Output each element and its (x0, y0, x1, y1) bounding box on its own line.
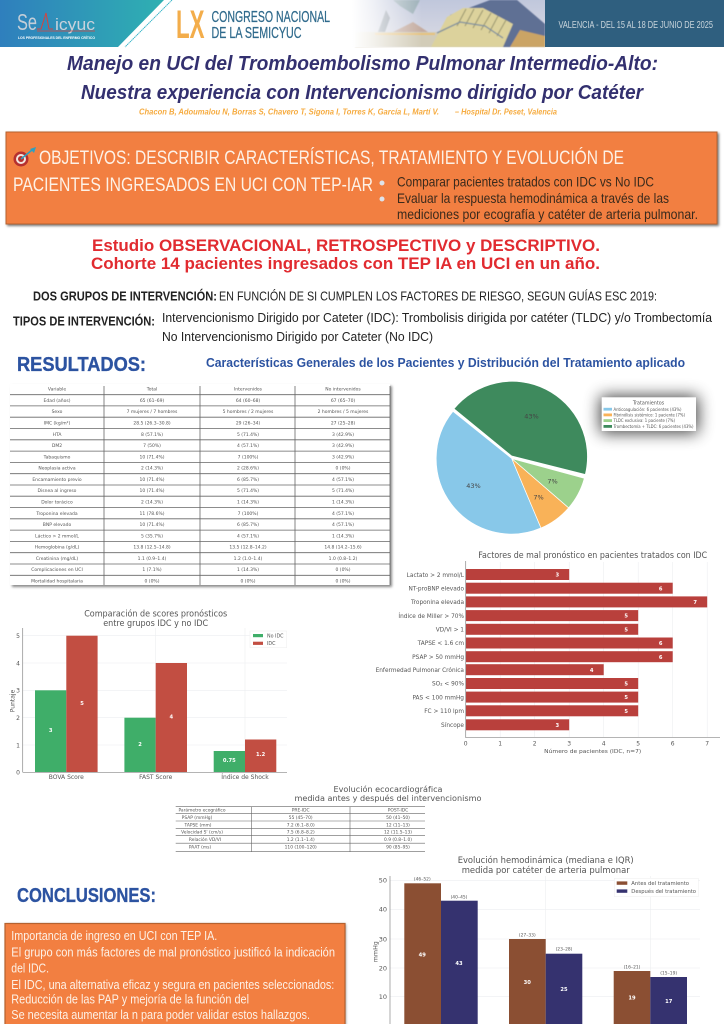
bar values: 43 (455, 961, 463, 967)
bar values: 6 (659, 641, 663, 647)
slice: TLDC 7% (512, 458, 584, 508)
table: patient characteristics: Hemoglobina (g/dL) (35, 545, 80, 551)
chart legend: Antes del tratamiento (631, 881, 689, 887)
title: Nuestra experiencia con Intervencionismo dirigido por Catéter (81, 81, 644, 104)
table: patient characteristics: 0 (0%) (336, 567, 351, 573)
conclusions text: El grupo con más factores de mal pronóstico justificó la indicación (11, 945, 335, 959)
bar values: 5 (624, 695, 628, 701)
table: echocardiographic evolution: 7.2 (6.1–8.0) (287, 822, 315, 828)
logo: Semicyuc: Se (17, 9, 37, 35)
table: echocardiographic evolution: TAPSE (mm) (184, 822, 212, 828)
conclusions text: Reducción de las PAP y mejoría de la función del (11, 992, 249, 1006)
chart title: Comparación de scores pronósticos (84, 608, 228, 620)
table: patient characteristics: Intervenidos (234, 387, 263, 393)
IQR labels: (27–33) (519, 932, 536, 938)
congress name: DE LA SEMICYUC (212, 25, 302, 42)
table: echocardiographic evolution: 55 (45–70) (289, 815, 313, 821)
bar values: 3 (555, 573, 559, 579)
table: patient characteristics: 1.1 (0.9–1.4) (138, 556, 167, 562)
IQR labels: (46–52) (414, 876, 431, 882)
pie legend: Tratamientos (632, 401, 665, 407)
pie percentage labels: 7% (547, 477, 558, 485)
table: patient characteristics: 10 (71.4%) (140, 488, 165, 494)
conclusions text (11, 929, 335, 1022)
x axis ticks: 0 (464, 740, 468, 748)
y axis ticks: 3 (16, 688, 20, 695)
objective bullet list: Evaluar la respuesta hemodinámica a través de las (397, 190, 669, 206)
table: patient characteristics: 28.5 (26.3–30.8) (133, 420, 171, 426)
x axis ticks: 4 (602, 740, 606, 748)
x axis categories (49, 774, 269, 781)
y axis ticks: 50 (379, 877, 387, 885)
y axis ticks: 10 (379, 993, 387, 1001)
x axis categories: Índice de Shock (221, 774, 269, 781)
table: patient characteristics (10, 384, 392, 587)
pie legend: Trombectomía + TLDC: 6 pacientes (43%) (613, 423, 694, 430)
bars: IDC (66, 636, 276, 772)
table: patient characteristics: Variable (48, 387, 66, 393)
table: patient characteristics: Neoplasia activa (38, 466, 76, 472)
conclusions text: del IDC. (11, 961, 49, 975)
table: patient characteristics: 4 (57.1%) (237, 443, 259, 449)
y axis ticks: 30 (379, 935, 387, 943)
category labels: Lactato > 2 mmol/L (407, 573, 465, 579)
y axis ticks (379, 877, 387, 1001)
intervention groups text: TIPOS DE INTERVENCIÓN: (13, 314, 155, 328)
table: patient characteristics: 6 (85.7%) (237, 522, 259, 528)
x axis categories: BOVA Score (49, 774, 84, 781)
LX mark: LX (176, 3, 205, 47)
intervention groups text: DOS GRUPOS DE INTERVENCIÓN: (33, 288, 217, 304)
table: patient characteristics: 4 (57.1%) (332, 477, 354, 483)
y axis ticks: 0 (16, 770, 20, 777)
header blue band (0, 0, 164, 47)
heading: resultados: RESULTADOS: (17, 353, 146, 376)
table: patient characteristics: 64 (60–68) (236, 398, 260, 404)
table: patient characteristics: HTA (53, 432, 62, 438)
bars: después del tratamiento (441, 901, 687, 1024)
table: patient characteristics: 5 (71.4%) (237, 488, 259, 494)
heading: conclusiones: CONCLUSIONES: (17, 884, 156, 907)
bar values: 19 (628, 996, 636, 1002)
table: patient characteristics: Troponina elevada (35, 511, 78, 517)
x axis ticks: 6 (671, 740, 675, 748)
objective heading (13, 146, 624, 196)
conclusions text: Se necesita aumentar la n para poder validar estos hallazgos. (11, 1008, 310, 1022)
y axis ticks (16, 633, 20, 777)
congress name (212, 9, 330, 42)
authors: – Hospital Dr. Peset, Valencia (455, 108, 558, 116)
IQR labels: (23–28) (556, 947, 573, 953)
conclusions text: El IDC, una alternativa eficaz y segura en pacientes seleccionados: (11, 978, 334, 992)
table: echocardiographic evolution: 1.2 (1.1–1.4) (287, 837, 315, 843)
IQR labels: (15–19) (660, 970, 677, 976)
objective bullet list (380, 174, 698, 222)
pie legend: TLDC exclusiva: 1 paciente (7%) (613, 418, 675, 424)
logo: Semicyuc: LOS PROFESIONALES DEL ENFERMO CRÍTICO (18, 35, 96, 40)
IQR labels (414, 876, 677, 976)
x axis label: Número de pacientes (IDC, n=7) (544, 748, 641, 755)
title (67, 52, 658, 104)
bar values: 5 (624, 709, 628, 715)
study design text (91, 236, 600, 273)
study design text: Estudio OBSERVACIONAL, RETROSPECTIVO y DESCRIPTIVO. (92, 236, 600, 255)
table: patient characteristics: 2 (14.3%) (141, 500, 163, 506)
horizontal bars (466, 569, 707, 730)
header banner (0, 0, 724, 47)
table: echocardiographic evolution: 12 (11–13) (386, 822, 410, 828)
table: patient characteristics: 2 hombres / 5 mujeres (318, 409, 369, 415)
x axis ticks (464, 740, 709, 748)
bar values: 7 (693, 600, 697, 606)
table: patient characteristics: 10 (71.4%) (140, 454, 165, 460)
table: echocardiographic evolution: 110 (100–120) (285, 845, 317, 851)
table: patient characteristics: 1.0 (0.8–1.2) (329, 556, 358, 562)
conclusions text: Importancia de ingreso en UCI con TEP IA. (11, 929, 217, 943)
table: patient characteristics: Creatinina (mg/dL) (36, 556, 78, 562)
bar values: 0.75 (223, 758, 236, 764)
table: patient characteristics: 7 mujeres / 7 hombres (127, 409, 178, 415)
table: patient characteristics: 1.2 (1.0–1.4) (234, 556, 263, 562)
bar values: 30 (524, 980, 531, 986)
y axis line (389, 876, 391, 1024)
photo: Valencia architecture (352, 0, 546, 47)
table: patient characteristics: 4 (57.1%) (332, 511, 354, 517)
chart title: medida por catéter de arteria pulmonar (462, 865, 630, 876)
category labels: Enfermedad Pulmonar Crónica (376, 667, 464, 674)
bar values (419, 952, 673, 1005)
table: echocardiographic evolution: POST-IDC (388, 808, 408, 814)
bar values: 3 (555, 723, 559, 729)
table: patient characteristics: 1 (14.3%) (237, 567, 259, 573)
chart legend: Después del tratamiento (631, 888, 696, 895)
dates panel (545, 0, 724, 47)
IQR labels: (40–45) (451, 894, 468, 900)
y axis ticks: 40 (379, 906, 387, 914)
table: patient characteristics: Edad (años) (44, 398, 71, 404)
table: echocardiographic evolution: Velocidad S' (cm/s) (181, 830, 223, 836)
bar values (49, 701, 266, 764)
table: patient characteristics: Sexo (52, 409, 63, 415)
category labels: Síncope (441, 722, 464, 729)
table: patient characteristics: 2 (28.6%) (237, 466, 259, 472)
echo evolution title: medida antes y después del intervencionismo (294, 793, 482, 803)
table: echocardiographic evolution: 50 (41–50) (386, 815, 410, 821)
table: patient characteristics: 10 (71.4%) (140, 522, 165, 528)
category labels: Troponina elevada (410, 600, 464, 606)
table: patient characteristics: Total (146, 387, 157, 393)
table: patient characteristics: 5 (35.7%) (141, 533, 163, 539)
table: patient characteristics: 5 (71.4%) (332, 488, 354, 494)
congress name: CONGRESO NACIONAL (212, 9, 330, 26)
bars: No IDC (35, 690, 245, 772)
table: echocardiographic evolution: 7.5 (6.8–8.2) (287, 830, 315, 836)
objective bullet list: Comparar pacientes tratados con IDC vs No IDC (397, 174, 654, 190)
chart title (84, 608, 228, 629)
table: patient characteristics: 0 (0%) (241, 578, 256, 584)
category labels: PSAP > 50 mmHg (412, 655, 464, 661)
category labels: Índice de Miller > 70% (398, 613, 464, 620)
bar chart: evolución hemodinámica (372, 855, 700, 1024)
table: echocardiographic evolution: Parámetro ecográfico (178, 806, 226, 814)
axes (23, 628, 287, 772)
bar values: 4 (169, 714, 173, 720)
pie legend (600, 396, 698, 433)
table: echocardiographic evolution: PAAT (ms) (189, 845, 211, 851)
icon: target with dart (14, 147, 36, 166)
table: patient characteristics: 1 (14.3%) (332, 533, 354, 539)
logo: Semicyuc (17, 9, 96, 40)
heading: patient characteristics: Características Generales de los Pacientes y Distribución del Tratamiento aplicado (206, 356, 685, 370)
chart legend: IDC (267, 641, 276, 647)
table: echocardiographic evolution: PSAP (mmHg) (182, 815, 213, 821)
x axis ticks: 5 (636, 740, 640, 748)
table: patient characteristics: 0 (0%) (336, 466, 351, 472)
table: patient characteristics: 7 (100%) (238, 454, 259, 460)
table: echocardiographic evolution: 12 (11.5–13) (384, 830, 412, 836)
panel: conclusiones (5, 924, 346, 1024)
bar values: 5 (624, 627, 628, 633)
bar values: 5 (624, 614, 628, 620)
table: patient characteristics: 10 (71.4%) (140, 477, 165, 483)
thin teal diagonal line (125, 0, 172, 47)
table: patient characteristics: DM2 (52, 443, 62, 449)
logo: Semicyuc: icyuc (55, 15, 96, 34)
chart title: entre grupos IDC y no IDC (103, 619, 208, 629)
table: patient characteristics: 3 (42.9%) (332, 454, 354, 460)
pie percentage labels (466, 412, 558, 502)
echo evolution title (294, 784, 482, 803)
bar chart: factores de mal pronóstico (376, 550, 720, 755)
table: patient characteristics: 8 (57.1%) (141, 432, 163, 438)
axes (466, 561, 720, 738)
y axis label: Puntaje (10, 689, 16, 712)
bar values: 25 (560, 987, 568, 993)
bar values: 2 (138, 742, 142, 748)
table: patient characteristics: Mortalidad hospitalaria (31, 578, 83, 584)
bar values: 3 (49, 728, 53, 734)
category labels: SO₂ < 90% (432, 682, 464, 688)
category labels: NT-proBNP elevado (408, 586, 464, 592)
table: patient characteristics: Complicaciones en UCI (31, 567, 83, 573)
table: patient characteristics: 3 (42.9%) (332, 432, 354, 438)
chart legend (614, 878, 698, 897)
bar values: 6 (659, 586, 663, 592)
IQR labels: (16–21) (624, 965, 641, 971)
table: patient characteristics: 3 (42.9%) (332, 443, 354, 449)
table: patient characteristics: 14.8 (14.2–15.6) (324, 545, 362, 551)
table: patient characteristics: 13.8 (12.5–14.8) (133, 545, 171, 551)
objective heading: PACIENTES INGRESADOS EN UCI CON TEP-IAR (13, 174, 373, 196)
table: echocardiographic evolution: 90 (85–95) (386, 845, 410, 851)
y axis ticks: 4 (16, 660, 20, 667)
table: patient characteristics: 6 (85.7%) (237, 477, 259, 483)
title: Manejo en UCI del Tromboembolismo Pulmonar Intermedio-Alto: (67, 52, 658, 75)
chart title: Factores de mal pronóstico en pacientes tratados con IDC (478, 550, 707, 560)
table: patient characteristics: No intervenidos (325, 387, 361, 393)
table: patient characteristics: 65 (61–69) (140, 398, 164, 404)
echo evolution title: Evolución ecocardiográfica (334, 784, 442, 794)
table: patient characteristics: Encamamiento previo (32, 477, 82, 483)
table: patient characteristics: 5 hombres / 2 mujeres (223, 409, 274, 415)
slice: trombectomía + TLDC 43% (454, 381, 587, 474)
table: patient characteristics: BNP elevado (43, 522, 71, 528)
x axis ticks: 7 (705, 740, 709, 748)
slice: fibrinólisis 7% (512, 458, 569, 528)
bar values: 17 (665, 999, 673, 1005)
intervention groups text (13, 288, 713, 344)
bar values: 1.2 (256, 752, 266, 758)
authors: Chacon B, Adoumalou N, Borras S, Chavero T, Sigona I, Torres K, García L, Martí V. (139, 108, 439, 116)
table: patient characteristics: 7 (50%) (143, 443, 161, 449)
table: echocardiographic evolution: 0.9 (0.8–1.0) (384, 837, 412, 843)
pie percentage labels: 43% (466, 482, 481, 490)
intervention groups text: No Intervencionismo Dirigido por Cateter (No IDC) (162, 329, 433, 344)
study design text: Cohorte 14 pacientes ingresados con TEP IA en UCI en un año. (91, 254, 600, 273)
bar values: 5 (80, 701, 84, 707)
panel: objetivos (6, 132, 719, 226)
chart legend: No IDC (267, 634, 284, 640)
y axis label: mmHg (372, 941, 380, 962)
table: patient characteristics: 1 (14.3%) (332, 500, 354, 506)
category labels: VD/VI > 1 (436, 628, 464, 634)
pie percentage labels: 43% (524, 412, 539, 420)
table: patient characteristics: 2 (14.3%) (141, 466, 163, 472)
category labels (376, 573, 465, 729)
bar values: 5 (624, 682, 628, 688)
table: patient characteristics: 27 (25–28) (331, 420, 355, 426)
table: echocardiographic evolution: PRE-IDC (292, 808, 310, 814)
pie chart: treatment distribution (436, 381, 587, 534)
y axis ticks: 20 (379, 964, 387, 972)
category labels: TAPSE < 1.6 cm (417, 641, 464, 647)
table: patient characteristics: 5 (71.4%) (237, 432, 259, 438)
table: patient characteristics: 4 (57.1%) (237, 533, 259, 539)
table: patient characteristics: 67 (65–70) (331, 398, 355, 404)
pie legend: Fibrinólisis sistémico: 1 paciente (7%) (614, 412, 685, 418)
bar values: 6 (659, 655, 663, 661)
bar values: 4 (590, 668, 594, 674)
x axis ticks: 2 (533, 740, 537, 748)
table: echocardiographic evolution (176, 806, 425, 852)
table: patient characteristics: 11 (78.6%) (140, 511, 165, 517)
table: patient characteristics: 13.5 (12.8–14.2) (229, 545, 267, 551)
chart legend (250, 631, 287, 648)
bars: antes del tratamiento (404, 883, 650, 1024)
y axis ticks: 5 (16, 633, 20, 640)
intervention groups text: EN FUNCIÓN DE SI CUMPLEN LOS FACTORES DE RIESGO, SEGUN GUÍAS ESC 2019: (219, 288, 657, 304)
table: patient characteristics: 4 (57.1%) (332, 522, 354, 528)
chart title: Evolución hemodinámica (mediana e IQR) (458, 855, 634, 866)
table: patient characteristics: Dolor torácico (41, 498, 73, 506)
y axis ticks: 1 (16, 742, 20, 749)
category labels: PAS < 100 mmHg (412, 695, 464, 701)
table: patient characteristics: Tabaquismo (43, 454, 71, 460)
pie percentage labels: 7% (533, 494, 544, 502)
table: patient characteristics: IMC (kg/m²) (44, 420, 70, 426)
table: patient characteristics: 7 (100%) (238, 511, 259, 517)
table: patient characteristics: Disnea al ingreso (38, 488, 77, 494)
table: patient characteristics: 29 (26–34) (236, 420, 260, 426)
chart title (458, 855, 634, 876)
x axis categories: FAST Score (139, 774, 173, 781)
category labels: FC > 110 lpm (424, 709, 464, 715)
slice: anticoagulación 43% (436, 411, 541, 534)
table: patient characteristics: 0 (0%) (145, 578, 160, 584)
x axis ticks: 3 (567, 740, 571, 748)
bar values: 49 (419, 952, 426, 958)
x axis ticks: 1 (498, 740, 502, 748)
table: echocardiographic evolution: Relación VD/VI (189, 836, 221, 843)
table: patient characteristics: Láctico > 2 mmol/L (35, 532, 79, 539)
y axis ticks: 2 (16, 715, 20, 722)
pie legend: Anticoagulación: 6 pacientes (43%) (614, 406, 682, 413)
bar values (555, 573, 697, 729)
table: patient characteristics: 1 (14.3%) (237, 500, 259, 506)
table: patient characteristics: 0 (0%) (336, 578, 351, 584)
bar chart: scores pronósticos (10, 608, 287, 781)
table: patient characteristics: 1 (7.1%) (142, 567, 162, 573)
